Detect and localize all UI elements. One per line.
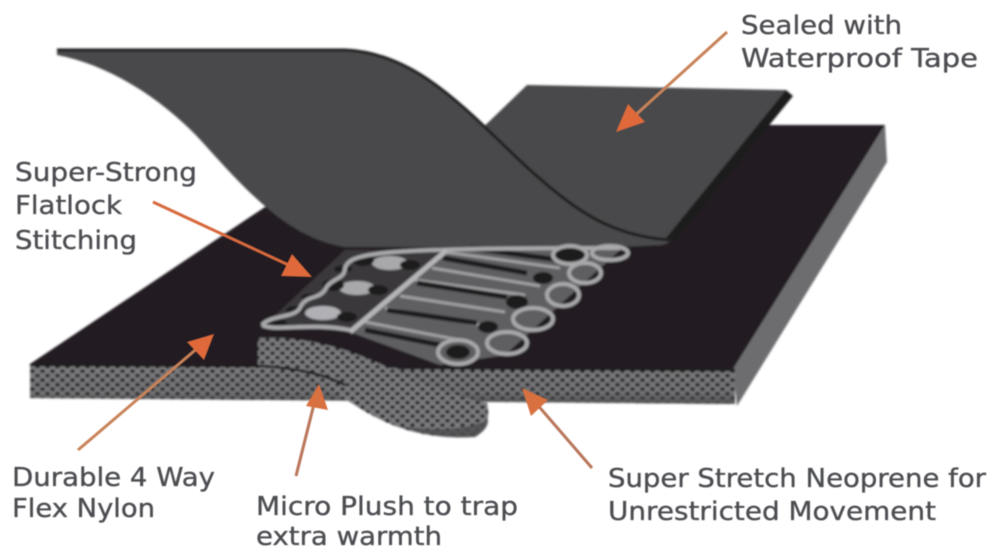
label: nylon: Durable 4 Way [12, 463, 215, 493]
tape panel dark edge [666, 90, 793, 241]
arrow: neoprene [522, 388, 592, 468]
base fabric: right side edge [733, 125, 887, 406]
label: stitching: Stitching [15, 226, 137, 256]
arrow: nylon [78, 334, 214, 450]
arrow: flatlock stitching [153, 202, 312, 277]
flap over the seam [57, 49, 669, 247]
label: neoprene: Unrestricted Movement [608, 497, 936, 527]
stitch black slots [267, 254, 553, 359]
label: nylon [12, 463, 215, 524]
label: stitching: Flatlock [15, 191, 122, 221]
label: micro plush: Micro Plush to trap [256, 492, 518, 522]
arrows [78, 32, 727, 476]
left stitch band, dark [265, 250, 445, 332]
arrow: micro plush [296, 384, 328, 476]
black bars between threads [365, 248, 560, 345]
neoprene top edge lines [30, 365, 735, 385]
label: stitching: Super-Strong [15, 158, 197, 188]
crossing stitch [350, 250, 447, 332]
under layer: micro plush strip [258, 338, 488, 437]
label: waterproof tape [741, 11, 978, 74]
scalloped loops [262, 246, 628, 364]
bar thread highlights [365, 252, 560, 342]
micro plush lower shading [400, 420, 488, 437]
tape panel [470, 85, 792, 240]
label: nylon: Flex Nylon [12, 494, 155, 524]
label: waterproof tape: Waterproof Tape [741, 44, 978, 74]
label: micro plush: extra warmth [256, 522, 442, 552]
label: waterproof tape: Sealed with [741, 11, 902, 41]
base fabric: black nylon top [30, 125, 885, 369]
flap dark outline [57, 50, 670, 240]
base fabric: front neoprene edge [30, 365, 735, 404]
label: stitching [15, 158, 197, 256]
flatlock stitching [262, 246, 628, 365]
label: micro plush [256, 492, 518, 552]
neoprene lower shading [30, 365, 735, 404]
label: neoprene: Super Stretch Neoprene for [608, 464, 986, 494]
illustration: layered neoprene seam [30, 49, 887, 437]
stitch band, grey threads [350, 250, 620, 365]
arrow: waterproof tape [616, 32, 727, 132]
left-side light patches [372, 256, 408, 270]
label: neoprene [608, 464, 986, 527]
